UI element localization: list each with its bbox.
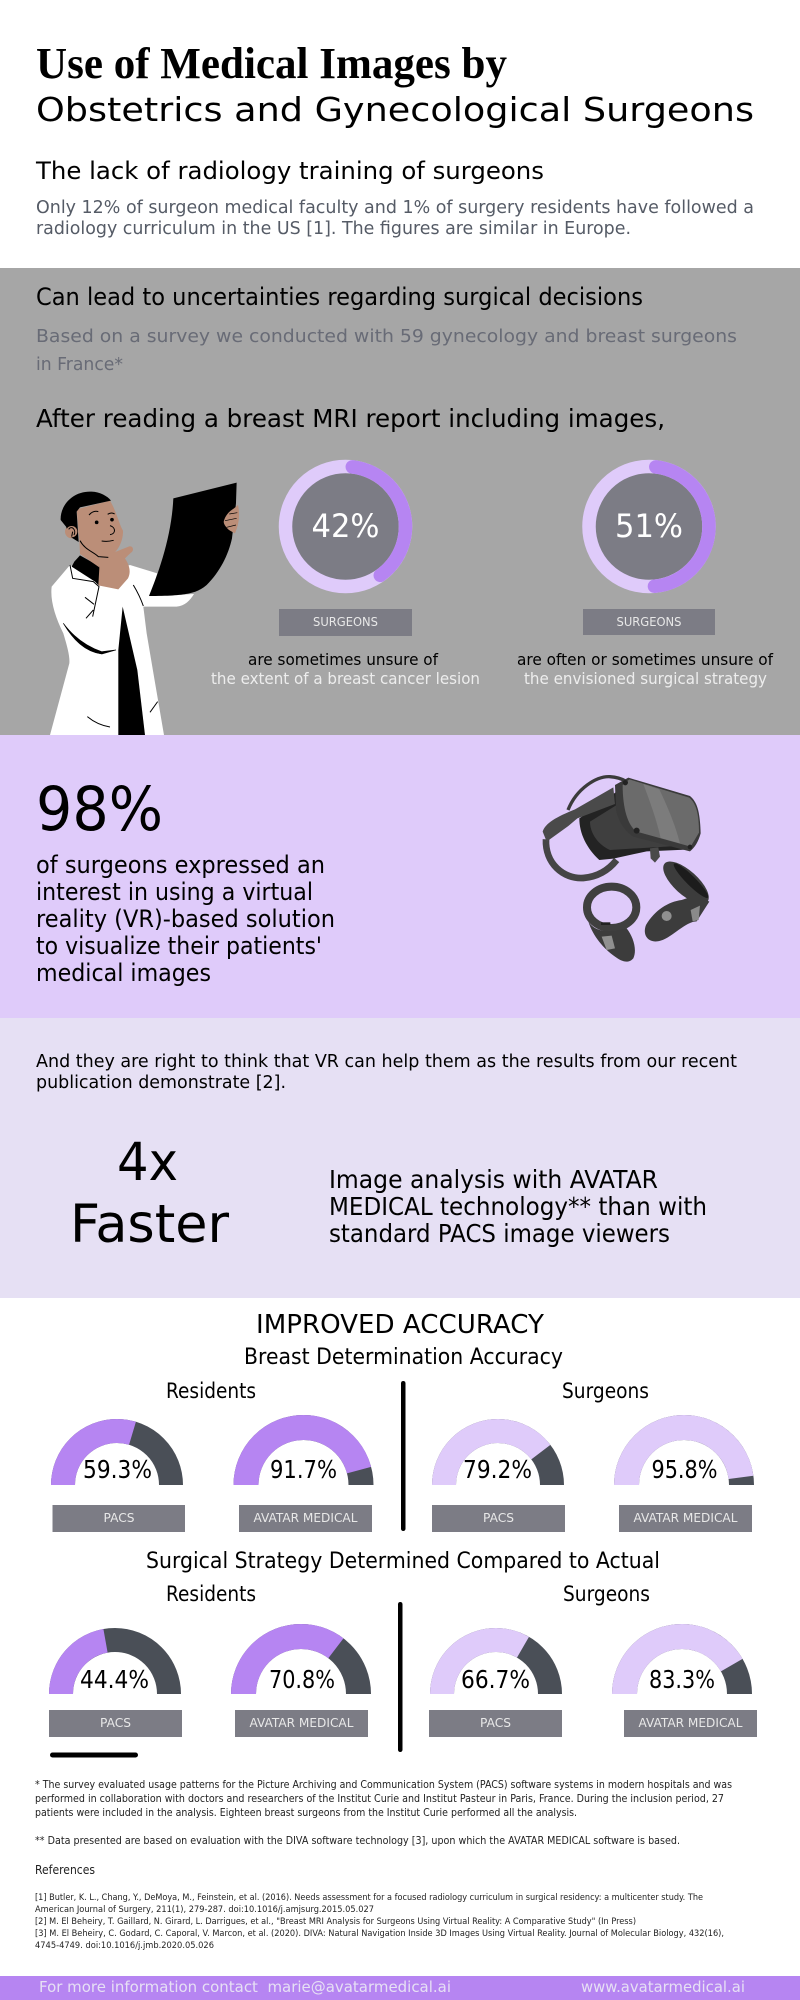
heading: uncertainties: Can lead to uncertainties regarding surgical decisions xyxy=(36,283,643,311)
gauge: surgeons AVATAR MEDICAL 83.3% xyxy=(624,1636,740,1694)
text block: 51% caption xyxy=(517,650,773,688)
label: PACS xyxy=(52,1505,185,1532)
label: residents: Residents xyxy=(166,1582,256,1606)
gauge: surgeons AVATAR MEDICAL 95.8% xyxy=(626,1428,742,1485)
icon: VR headset and controllers xyxy=(543,777,715,962)
label: surgeons xyxy=(279,609,412,636)
text block: survey description xyxy=(36,326,737,375)
text block: VR interest: reality (VR)-based solution xyxy=(36,905,335,933)
gauge: residents AVATAR MEDICAL 91.7% xyxy=(246,1428,361,1485)
gauge: residents AVATAR MEDICAL 91.7%: 91.7% xyxy=(270,1455,337,1484)
label: PACS xyxy=(429,1710,562,1737)
label: surgeons xyxy=(583,609,715,635)
label: surgeons: SURGEONS xyxy=(313,615,378,629)
text block: 51% caption: the envisioned surgical strategy xyxy=(524,669,767,688)
text block: lack of radiology training: The lack of radiology training of surgeons xyxy=(35,157,544,185)
label: surgeons: SURGEONS xyxy=(616,615,682,629)
heading: after reading: After reading a breast MRI report including images, xyxy=(36,404,665,433)
label: residents: Residents xyxy=(166,1379,256,1403)
panel: 98% interest in VR xyxy=(0,735,800,1018)
label: surgeons: Surgeons xyxy=(563,1582,650,1606)
section: breast determination accuracy xyxy=(52,1345,752,1532)
label: PACS: PACS xyxy=(480,1716,511,1730)
heading: improved accuracy: IMPROVED ACCURACY xyxy=(256,1310,544,1340)
label: AVATAR MEDICAL xyxy=(619,1505,752,1532)
text block: 42% caption: the extent of a breast cancer lesion xyxy=(211,669,480,688)
text block: VR interest xyxy=(36,851,335,987)
panel: 4x faster xyxy=(0,1018,800,1298)
heading: breast determination: Breast Determination Accuracy xyxy=(244,1345,563,1370)
title: Obstetrics and Gynecological Surgeons xyxy=(36,90,754,129)
text block: references: 4745-4749. doi:10.1016/j.jmb.2020.05.026 xyxy=(35,1941,214,1951)
big number: 4x faster xyxy=(70,1132,229,1255)
text block: VR interest: of surgeons expressed an xyxy=(36,851,325,879)
text block: lack of radiology training: radiology curriculum in the US [1]. The figures are similar in Europe. xyxy=(36,218,631,239)
text block: image analysis: standard PACS image viewers xyxy=(329,1219,670,1248)
gauge: residents AVATAR MEDICAL 70.8% xyxy=(244,1636,358,1694)
text block: VR interest: medical images xyxy=(36,959,211,987)
text block: VR can help: And they are right to think that VR can help them as the results from our recent xyxy=(36,1051,737,1072)
label: AVATAR MEDICAL: AVATAR MEDICAL xyxy=(634,1511,738,1525)
label: PACS: PACS xyxy=(100,1716,131,1730)
footer: www.avatarmedical.ai xyxy=(581,1978,745,1996)
label: PACS xyxy=(432,1505,565,1532)
text block: survey description: in France* xyxy=(36,354,123,375)
gauge: surgeons AVATAR MEDICAL 95.8%: 95.8% xyxy=(652,1455,718,1484)
label: AVATAR MEDICAL xyxy=(235,1710,368,1737)
gauge: residents PACS 59.3%: 59.3% xyxy=(83,1455,152,1484)
gauge: residents AVATAR MEDICAL 70.8%: 70.8% xyxy=(269,1665,335,1694)
text block: 42% caption: are sometimes unsure of xyxy=(248,650,438,669)
label: AVATAR MEDICAL: AVATAR MEDICAL xyxy=(250,1716,354,1730)
gauge: residents PACS 59.3% xyxy=(63,1431,171,1485)
text block: footnotes: patients were included in the analysis. Eighteen breast surgeons from the Institut Curie performed all the analysis. xyxy=(35,1807,577,1819)
text block: references: American Journal of Surgery, 211(1), 279-287. doi:10.1016/j.amjsurg.2015.05.027 xyxy=(35,1905,374,1915)
label: AVATAR MEDICAL xyxy=(239,1505,372,1532)
label: PACS: PACS xyxy=(483,1511,514,1525)
text block: references: [1] Butler, K. L., Chang, Y., DeMoya, M., Feinstein, et al. (2016). Needs assessment for a focused radiology curriculum in surgical residency: a multicenter study. The xyxy=(35,1893,703,1903)
gauge: residents PACS 44.4%: 44.4% xyxy=(80,1665,149,1694)
text block: 42% caption xyxy=(211,650,480,688)
chart: 42% donut: 42% xyxy=(312,507,380,545)
gauge: surgeons PACS 79.2% xyxy=(444,1431,552,1485)
title xyxy=(36,39,754,129)
gauge: surgeons AVATAR MEDICAL 83.3%: 83.3% xyxy=(649,1665,715,1694)
label: surgeons: Surgeons xyxy=(562,1379,649,1403)
text block: footnotes: performed in collaboration with doctors and researchers of the Institut Curie and Institut Pasteur in Paris, France. During the inclusion period, 27 xyxy=(35,1793,724,1805)
text block: VR interest: to visualize their patients' xyxy=(36,932,322,960)
gauge: surgeons PACS 66.7% xyxy=(442,1640,550,1694)
divider: footnote rule xyxy=(50,1752,138,1758)
text block: survey description: Based on a survey we conducted with 59 gynecology and breast surgeons xyxy=(36,326,737,347)
panel: uncertainties survey xyxy=(0,268,800,735)
text block: footnotes xyxy=(35,1779,732,1847)
footer: For more information contact marie@avatarmedical.ai xyxy=(39,1978,451,1996)
gauge: surgeons PACS 79.2%: 79.2% xyxy=(463,1455,532,1484)
title: Use of Medical Images by xyxy=(36,39,507,88)
label: PACS: PACS xyxy=(104,1511,134,1525)
text block: lack of radiology training: Only 12% of surgeon medical faculty and 1% of surgery residents have followed a xyxy=(36,197,754,218)
gauge: surgeons PACS 66.7%: 66.7% xyxy=(461,1665,530,1694)
text block: image analysis xyxy=(329,1165,707,1248)
text block: references: [2] M. El Beheiry, T. Gaillard, N. Girard, L. Darrigues, et al., "Breast MRI Analysis for Surgeons Using Virtual Reality: A Comparative Study" (In Press) xyxy=(35,1917,636,1927)
chart: 51% donut: 51% xyxy=(615,507,683,545)
text block: image analysis: Image analysis with AVATAR xyxy=(329,1165,658,1194)
heading: surgical strategy: Surgical Strategy Determined Compared to Actual xyxy=(146,1549,660,1574)
text block: footnotes: * The survey evaluated usage patterns for the Picture Archiving and Communication System (PACS) software systems in modern hospitals and was xyxy=(35,1779,732,1791)
big number: 4x faster: 4x xyxy=(117,1132,178,1193)
text block: 51% caption: are often or sometimes unsure of xyxy=(517,650,773,669)
text block: VR interest: interest in using a virtual xyxy=(36,878,313,906)
heading: references: References xyxy=(35,1863,95,1877)
text block: VR can help: publication demonstrate [2]. xyxy=(36,1072,286,1093)
big number: 4x faster: Faster xyxy=(70,1194,229,1255)
section: surgical strategy xyxy=(49,1549,757,1752)
text block: references xyxy=(35,1893,724,1951)
footer xyxy=(0,1976,800,2000)
chart: 42% donut xyxy=(279,460,412,593)
text block: references: [3] M. El Beheiry, C. Godard, C. Caporal, V. Marcon, et al. (2020). DIVA: Natural Navigation Inside 3D Images Using Virtual Reality. Journal of Molecular Biology, 432(16), xyxy=(35,1929,724,1939)
divider: column separator xyxy=(401,1381,406,1531)
divider: column separator xyxy=(398,1602,402,1752)
text block: VR can help xyxy=(36,1051,737,1093)
text block: lack of radiology training xyxy=(35,157,754,239)
text block: footnotes: ** Data presented are based on evaluation with the DIVA software technology [3], upon which the AVATAR MEDICAL software is based. xyxy=(35,1835,680,1847)
label: AVATAR MEDICAL: AVATAR MEDICAL xyxy=(254,1511,358,1525)
text block: image analysis: MEDICAL technology** than with xyxy=(329,1192,707,1221)
big number: 98%: 98% xyxy=(36,774,163,845)
label: AVATAR MEDICAL xyxy=(624,1710,757,1737)
icon: doctor holding a scan xyxy=(50,483,239,735)
chart: 51% donut xyxy=(583,460,715,593)
gauge: residents PACS 44.4% xyxy=(61,1640,169,1694)
label: PACS xyxy=(49,1710,182,1737)
label: AVATAR MEDICAL: AVATAR MEDICAL xyxy=(638,1716,743,1730)
